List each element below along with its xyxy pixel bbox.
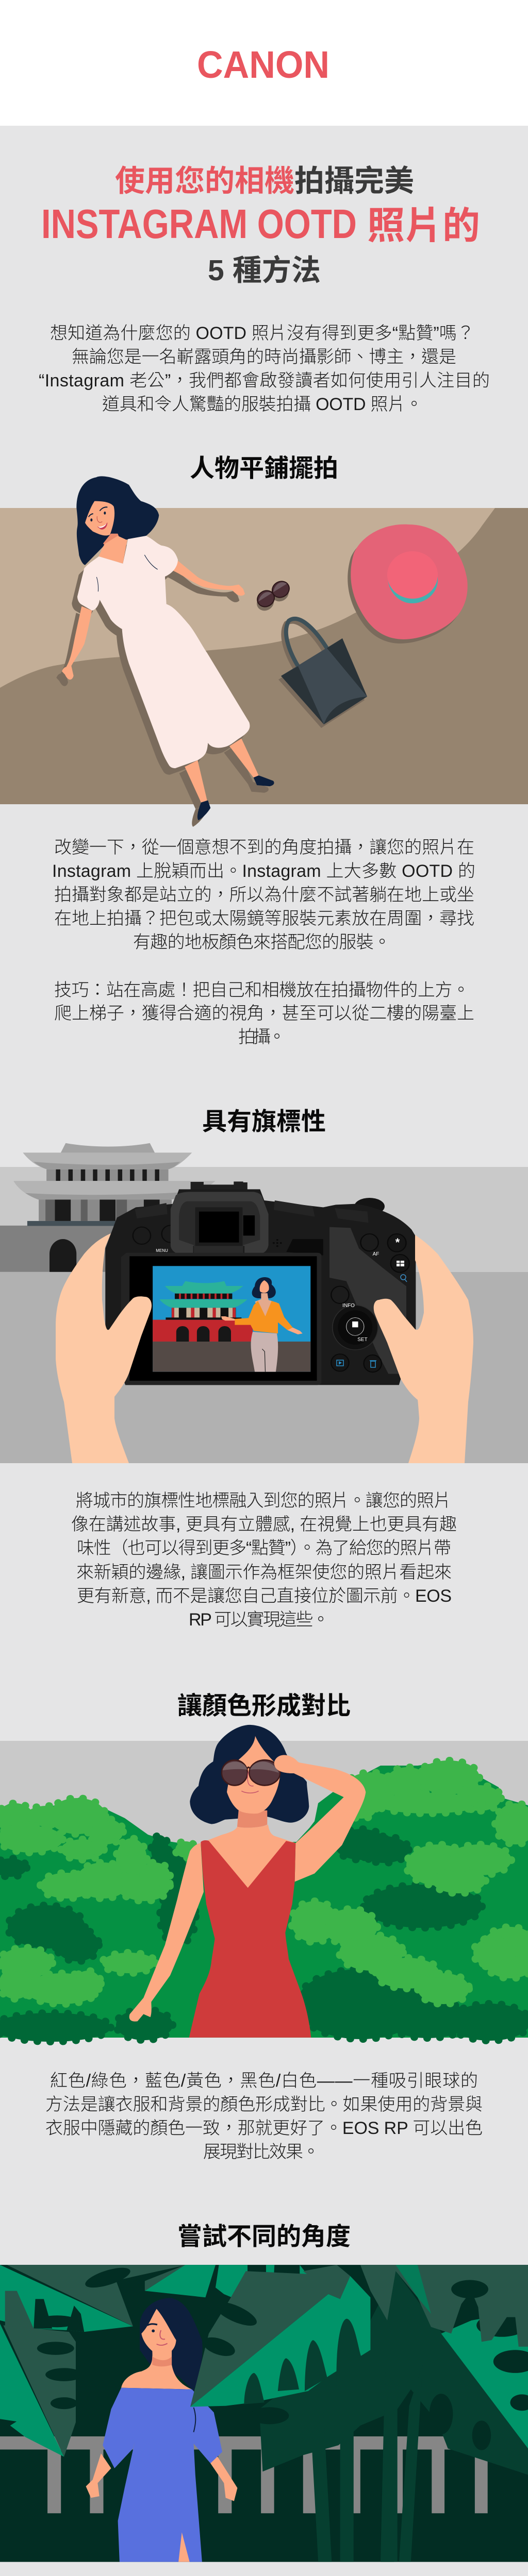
fist — [274, 1755, 299, 1773]
top centre leaves — [145, 2265, 350, 2304]
viewfinder cup — [171, 1192, 269, 1255]
face — [227, 1736, 280, 1814]
tip text: 技巧：站在高處！把自己和相機放在拍攝物件的上方。 — [54, 980, 470, 1000]
title line 2 latin: INSTAGRAM OOTD — [41, 201, 357, 247]
hat — [348, 524, 468, 643]
camera labels — [156, 1236, 407, 1367]
right arm — [276, 1755, 366, 1882]
fence — [0, 2436, 490, 2513]
bag — [278, 619, 367, 728]
body text 2: 將城市的旗標性地標融入到您的照片。讓您的照片 — [76, 1491, 451, 1511]
body text 3: 衣服中隱藏的顏色一致，那就更好了。EOS RP 可以出色 — [45, 2119, 483, 2138]
chest — [99, 536, 127, 564]
shadow — [56, 543, 269, 827]
left leaf — [0, 2324, 82, 2457]
sky and ground — [0, 1167, 528, 1463]
right bright leaf — [441, 2311, 528, 2449]
hair back — [140, 2298, 203, 2391]
floor dark — [0, 508, 528, 804]
body text 1: 拍攝對象都是站立的，所以為什麼不試著躺在地上或坐 — [54, 885, 474, 905]
bush mid green — [0, 1761, 528, 2038]
top left leaf — [0, 2264, 187, 2332]
left arm — [129, 1843, 204, 2022]
body text 1: 改變一下，從一個意想不到的角度拍攝，讓您的照片在 — [54, 838, 474, 857]
illustration: colour contrast woman and bushes — [0, 1725, 528, 2042]
arms — [86, 2453, 237, 2501]
heading: 讓顏色形成對比: 讓顏色形成對比 — [177, 1692, 351, 1720]
title line 1: 使用您的相機拍攝完美 — [115, 164, 414, 198]
neck and shoulders — [121, 2350, 192, 2389]
body text 2: RP 可以實現這些。 — [189, 1610, 329, 1630]
centre big leaf — [190, 2271, 370, 2407]
title line 2 cjk: 照片的 — [367, 205, 480, 247]
facial features — [89, 507, 107, 530]
camera labels: AF — [373, 1251, 379, 1257]
title block — [41, 164, 480, 287]
floor light — [0, 508, 528, 804]
shoes — [197, 775, 274, 820]
body text 3: 方法是讓衣服和背景的顏色形成對比。如果使用的背景與 — [45, 2095, 483, 2114]
body text 2: 更有新意, 而不是讓您自己直接位於圖示前。EOS — [77, 1586, 452, 1606]
tip text — [54, 980, 474, 1047]
illustration: flat lay woman on floor — [0, 476, 528, 827]
hair — [76, 476, 159, 565]
face — [141, 2309, 176, 2355]
dial — [333, 1305, 378, 1350]
screen photo — [153, 1266, 310, 1372]
hot shoe — [191, 1181, 248, 1190]
blue dress — [103, 2388, 222, 2562]
palace — [0, 1143, 216, 1272]
camera labels: * — [395, 1236, 400, 1249]
illustration: different angles, woman among leaves — [0, 2264, 528, 2562]
body text 1: Instagram 上脫穎而出。Instagram 上大多數 OOTD 的 — [52, 861, 475, 881]
shoulders — [201, 1825, 295, 1890]
body text 3 — [45, 2071, 483, 2162]
heading: 具有旗標性: 具有旗標性 — [202, 1108, 326, 1136]
top dial — [354, 1198, 385, 1215]
nose and smile — [241, 1772, 259, 1793]
dark background — [0, 2265, 528, 2562]
left buttons — [133, 1225, 179, 1244]
body text 3: 展現對比效果。 — [203, 2142, 320, 2162]
body text 2: 像在講述故事, 更具有立體感, 在視覺上也更具有趣 — [71, 1515, 457, 1534]
top right leaf — [360, 2265, 528, 2347]
logo: CANON: CANON — [197, 43, 329, 86]
face — [85, 501, 114, 536]
intro text — [39, 324, 490, 414]
illustration: camera and landmark — [0, 1143, 528, 1463]
intro text: 無論您是一名嶄露頭角的時尚攝影師、博主，還是 — [72, 347, 456, 367]
intro text: 想知道為什麼您的 OOTD 照片沒有得到更多“點贊”嗎？ — [50, 324, 474, 343]
camera labels: INFO — [342, 1303, 355, 1309]
woman — [56, 476, 274, 827]
right buttons — [331, 1234, 409, 1372]
limbs — [62, 561, 259, 803]
sunglasses — [252, 578, 294, 614]
tip text: 爬上梯子，獲得合適的視角，甚至可以從二樓的陽臺上 — [54, 1004, 474, 1023]
camera labels: SET — [357, 1337, 368, 1343]
hand: left — [56, 1233, 152, 1463]
body text 2 — [71, 1491, 457, 1630]
body text 2: 來新穎的邊緣, 讓圖示作為框架使您的照片看起來 — [76, 1563, 452, 1582]
body text 1: 在地上拍攝？把包或太陽鏡等服裝元素放在周圍，尋找 — [54, 909, 474, 928]
speaker dots — [273, 1239, 282, 1247]
screen woman — [252, 1277, 276, 1298]
bush dark patches — [0, 1829, 528, 2042]
facial features — [157, 2330, 168, 2345]
sunglasses — [222, 1760, 280, 1785]
woman in red dress — [129, 1725, 366, 2038]
right dark leaf — [250, 2271, 528, 2562]
heading: 人物平鋪擺拍: 人物平鋪擺拍 — [190, 455, 338, 482]
camera labels: MENU — [156, 1248, 168, 1253]
bush light patches — [0, 1760, 528, 2004]
body text 1 — [52, 838, 475, 952]
tip text: 拍攝。 — [238, 1027, 286, 1047]
top buttons — [135, 1200, 369, 1223]
neck — [103, 534, 120, 546]
body text 2: 味性（也可以得到更多“點贊”）。為了給您的照片帶 — [77, 1538, 451, 1558]
camera — [105, 1181, 416, 1385]
right panel — [329, 1227, 406, 1374]
woman in blue dress — [86, 2298, 237, 2562]
body text 3: 紅色/綠色，藍色/黃色，黑色/白色——一種吸引眼球的 — [50, 2071, 478, 2091]
wall background — [0, 1741, 528, 2038]
dress — [77, 536, 250, 768]
neck — [237, 1810, 267, 1828]
hair — [190, 1725, 309, 1824]
heading: 嘗試不同的角度: 嘗試不同的角度 — [177, 2223, 351, 2250]
body text 1: 有趣的地板顏色來搭配您的服裝。 — [133, 933, 391, 952]
screen bezel — [121, 1253, 322, 1385]
red dress — [189, 1840, 311, 2038]
camera body — [105, 1189, 416, 1385]
intro text: 道具和令人驚豔的服裝拍攝 OOTD 照片。 — [102, 395, 423, 414]
hand: right — [374, 1235, 473, 1463]
intro text: “Instagram 老公”，我們都會啟發讀者如何使用引人注目的 — [39, 371, 490, 391]
title line 3: 5 種方法 — [208, 254, 321, 287]
